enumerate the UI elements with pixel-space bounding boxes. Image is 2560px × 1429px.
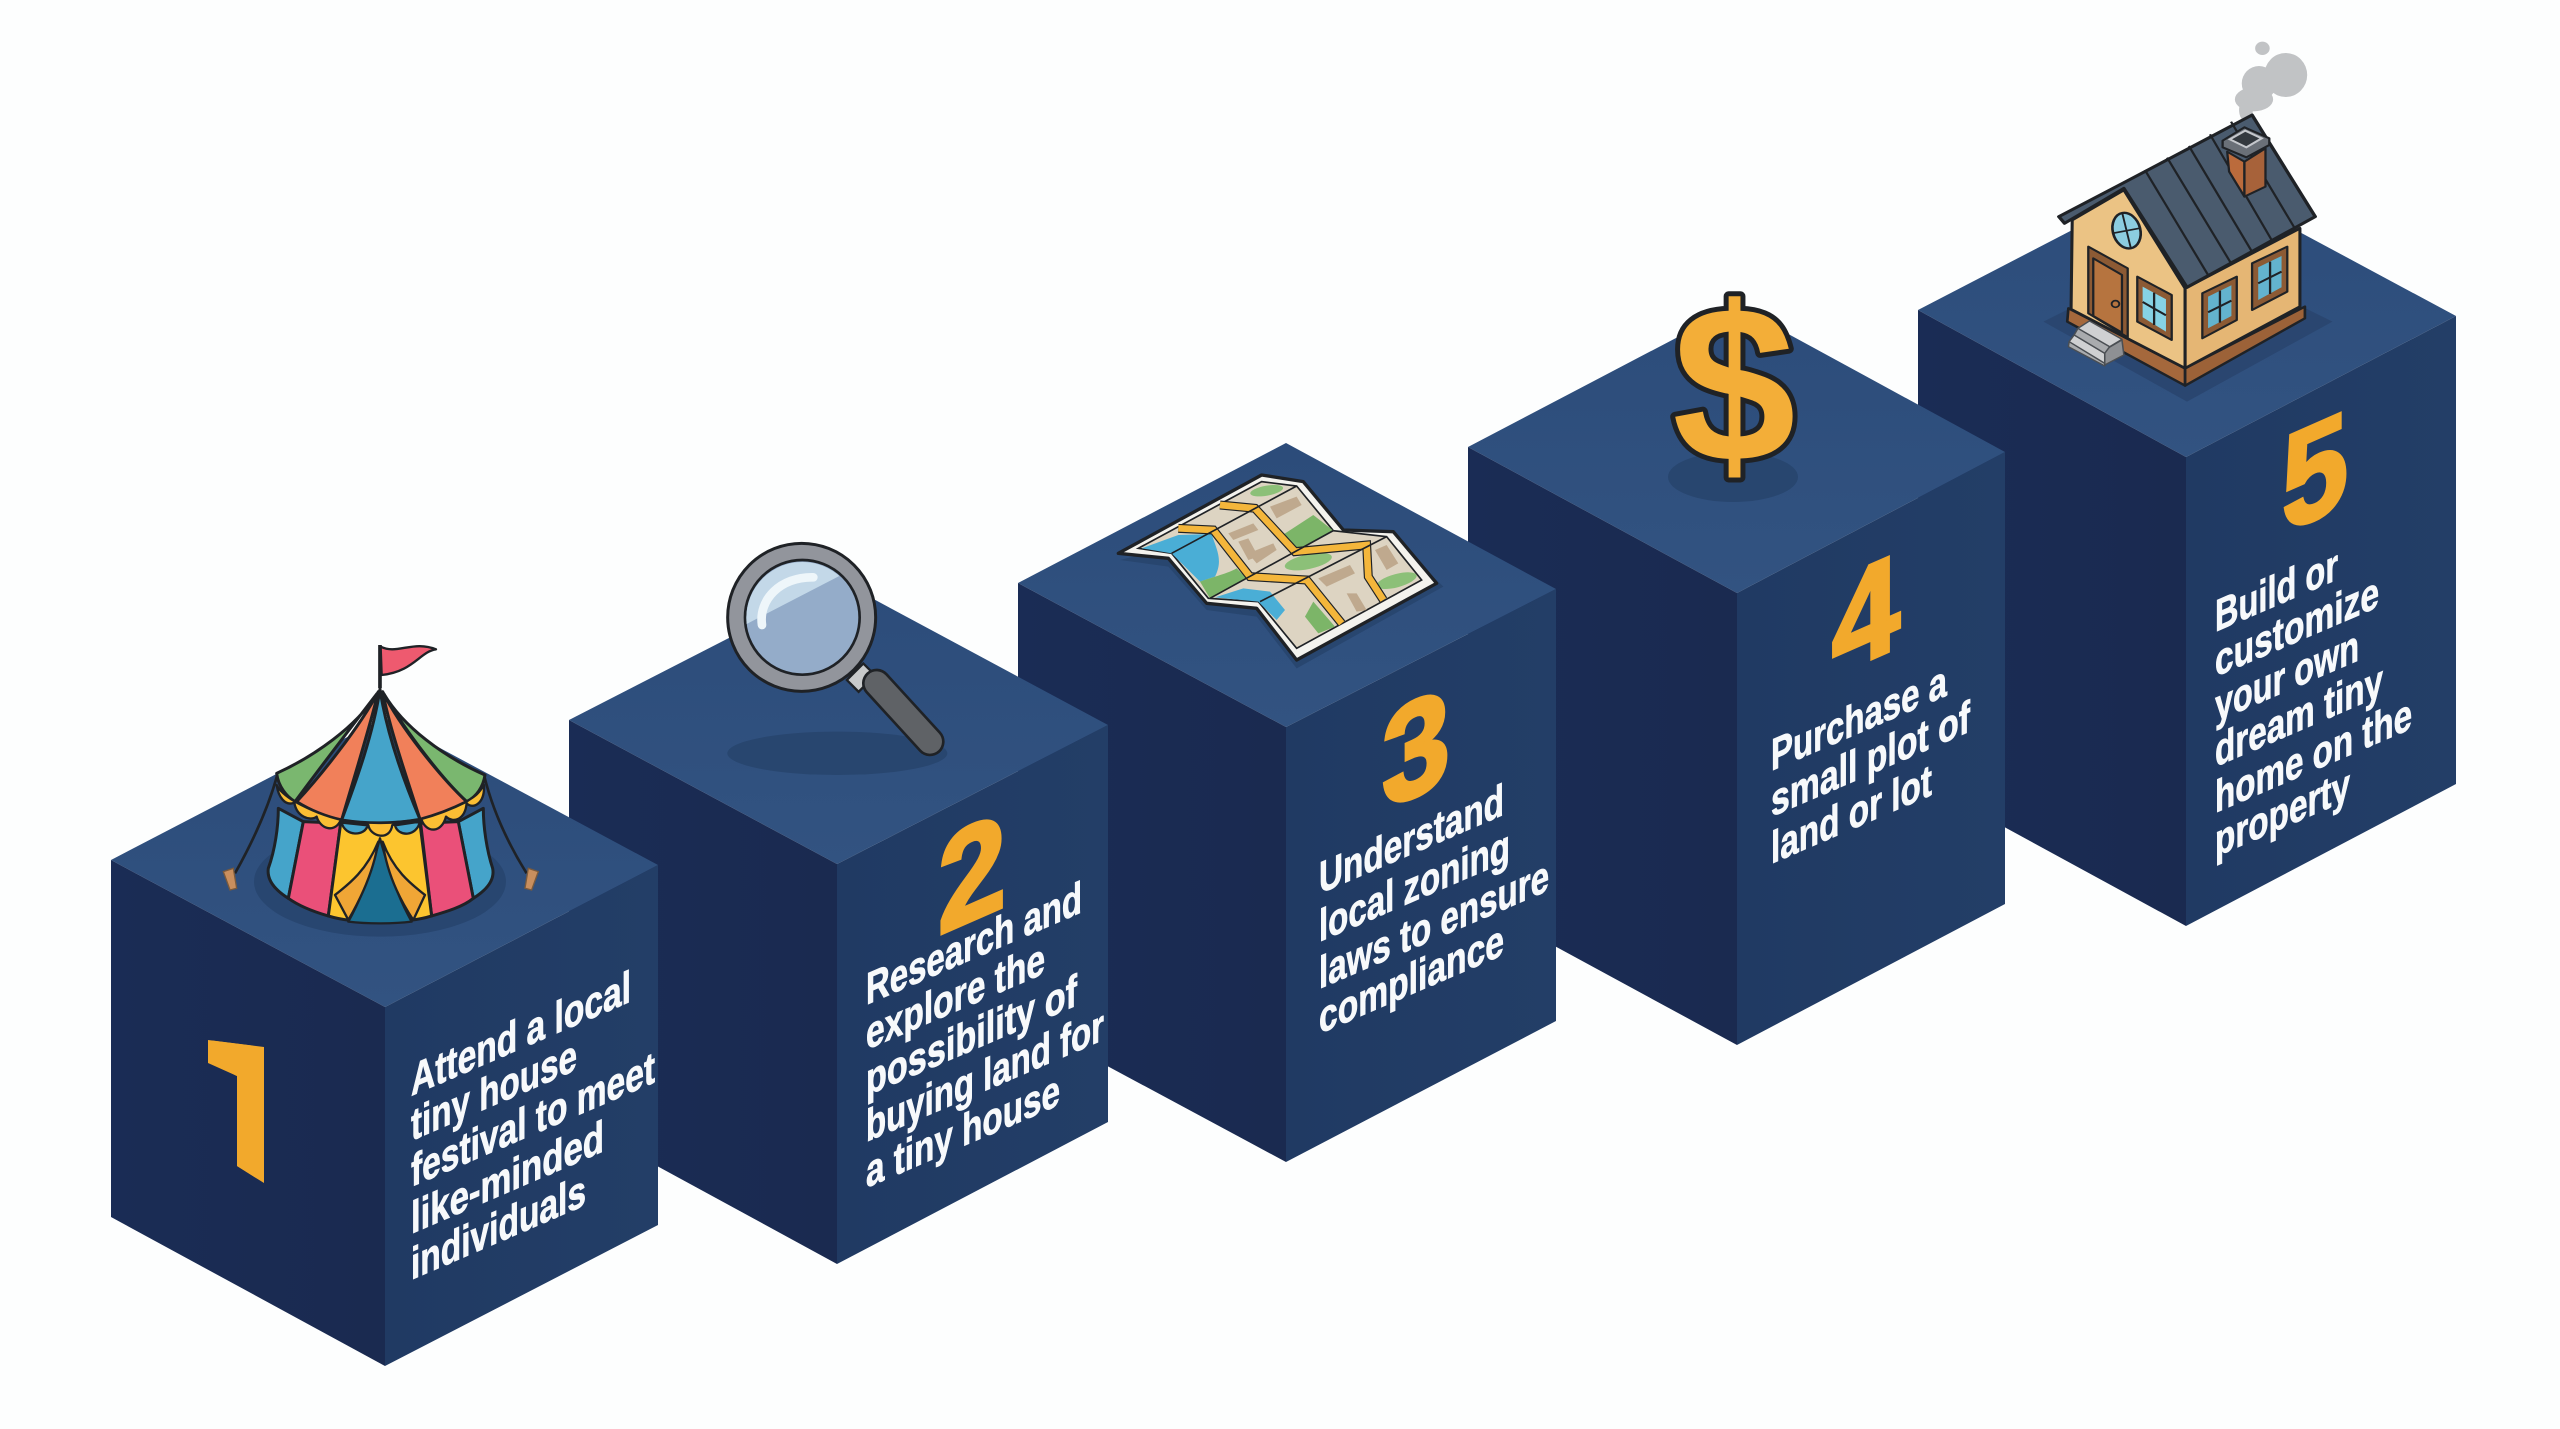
step 1 block <box>111 645 658 1366</box>
step 2 text: buying land for <box>866 999 1104 1152</box>
number 3: 3 <box>1382 658 1450 840</box>
step 1 text: Attend a local <box>411 960 631 1106</box>
step 2 block <box>569 543 1108 1264</box>
step 2 text: possibility of <box>866 964 1077 1106</box>
step 3 text: local zoning <box>1319 819 1510 952</box>
step 3 text: compliance <box>1319 913 1504 1044</box>
step 2 text: explore the <box>866 932 1045 1060</box>
step 3 text: Understand <box>1319 773 1504 904</box>
icon: tiny house <box>2044 42 2332 402</box>
step 5 text: property <box>2215 758 2350 867</box>
step 2 text: a tiny house <box>866 1063 1060 1198</box>
number 5: 5 <box>2282 382 2348 563</box>
step 4 block <box>1468 261 2005 1045</box>
step 1 text: individuals <box>411 1164 586 1290</box>
step 2 text: Research and <box>866 871 1082 1015</box>
icon: front steps <box>2068 321 2124 366</box>
step 3 block <box>1018 443 1556 1162</box>
step 1 text: festival to meet <box>411 1041 655 1197</box>
step 3 text <box>1319 773 1549 1044</box>
number 4: 4 <box>1832 524 1900 706</box>
step 1 text <box>411 960 655 1290</box>
icon: circus tent <box>223 645 538 937</box>
step 4 text: small plot of <box>1771 690 1970 827</box>
number 1: 1 <box>190 973 296 1238</box>
step 1 text: like-minded <box>411 1110 604 1244</box>
step 5 text: your own <box>2215 619 2359 732</box>
icon: dollar sign: $ <box>1672 261 1796 509</box>
step 4 text <box>1771 654 1970 874</box>
step 2 text <box>866 871 1104 1198</box>
step 3 text: laws to ensure <box>1319 849 1549 999</box>
step 4 text: Purchase a <box>1771 654 1948 781</box>
step 1 text: tiny house <box>411 1028 577 1151</box>
step 4 text: land or lot <box>1771 754 1932 874</box>
step 5 text: dream tiny <box>2215 654 2383 777</box>
number 2: 2 <box>938 783 1006 965</box>
step 5 text <box>2215 538 2412 867</box>
step 5 block <box>1918 42 2456 926</box>
icon: folded map <box>1118 475 1443 668</box>
icon: magnifying glass <box>727 543 947 775</box>
step 5 text: Build or <box>2215 538 2338 642</box>
step 5 text: customize <box>2215 565 2379 687</box>
step 5 text: home on the <box>2215 687 2412 823</box>
